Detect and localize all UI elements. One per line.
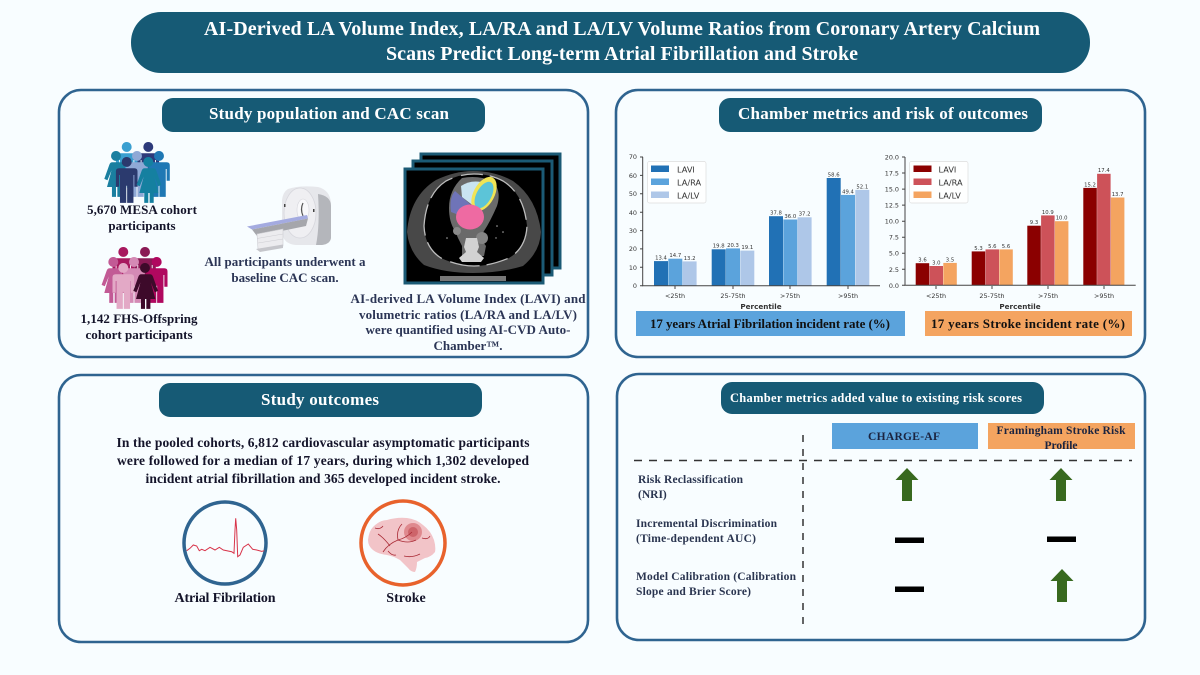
- text: FHS participants: 1,142 FHS-Offspring: [80, 311, 198, 326]
- arrow: NRI Framingham up: [1050, 468, 1072, 501]
- bar chart: atrial fibrillation incident rate: 10: [629, 264, 637, 272]
- bar chart: atrial fibrillation incident rate: 60: [629, 172, 637, 180]
- text: AI-derived metrics: AI-derived LA Volume Index (LAVI) and: [350, 291, 586, 306]
- bar chart: atrial fibrillation incident rate: 37.8: [770, 211, 783, 217]
- bar chart: stroke incident rate: 5.3: [974, 246, 983, 252]
- bar chart: atrial fibrillation incident rate: 49.4: [842, 189, 855, 195]
- text: MESA participants: [87, 202, 198, 233]
- row label: model calibration: Model Calibration (Calibration: [636, 571, 797, 583]
- bar chart: atrial fibrillation incident rate: <25th: [665, 292, 685, 300]
- label: atrial fibrillation: Atrial Fibrilation: [174, 591, 276, 606]
- text: baseline CAC scan: baseline CAC scan.: [231, 270, 339, 285]
- caption: atrial fibrillation rate: [636, 311, 905, 336]
- bar chart: stroke incident rate: [885, 154, 1136, 311]
- bar chart: stroke incident rate: 5.6: [988, 244, 997, 250]
- text: cohort summary: [116, 435, 530, 486]
- column header: Framingham: [988, 423, 1135, 452]
- legend: LAVI: [677, 164, 695, 174]
- bar chart: atrial fibrillation incident rate: 20.3: [727, 243, 739, 249]
- text: cohort summary: incident atrial fibrillation and 365 developed incident stroke.: [146, 471, 500, 486]
- text: AI-derived metrics: Chamber™.: [434, 338, 502, 353]
- panel: chamber metrics and risk of outcomes: [616, 90, 1145, 357]
- icon: FHS-Offspring cohort people: [102, 247, 168, 309]
- row label: risk reclassification: Risk Reclassification: [638, 474, 744, 486]
- bar chart: stroke incident rate: 3.6: [918, 258, 927, 264]
- heading: chamber metrics: [719, 98, 1042, 132]
- row label: risk reclassification: (NRI): [638, 489, 667, 501]
- bar chart: atrial fibrillation incident rate: 30: [629, 227, 637, 235]
- column header: Framingham: Framingham Stroke Risk: [996, 425, 1126, 437]
- heading: study outcomes: [159, 383, 482, 417]
- bar chart: stroke incident rate: 20.0: [885, 154, 899, 162]
- bar chart: stroke incident rate: 9.3: [1030, 220, 1038, 226]
- column header: CHARGE-AF: [832, 423, 978, 449]
- bar chart: atrial fibrillation incident rate: Percentile: [740, 302, 782, 311]
- bar chart: stroke incident rate: 25-75th: [979, 292, 1005, 300]
- caption: stroke rate: 17 years Stroke incident rate (%): [931, 316, 1125, 331]
- icon: MESA cohort people: [104, 142, 170, 203]
- bar chart: stroke incident rate: Percentile: [999, 302, 1041, 311]
- label: stroke: Stroke: [386, 591, 426, 606]
- bar chart: atrial fibrillation incident rate: 13.2: [684, 256, 695, 262]
- bar chart: stroke incident rate: 12.5: [885, 202, 899, 210]
- bar chart: atrial fibrillation incident rate: 20: [629, 245, 637, 253]
- legend: LA/LV: [938, 190, 961, 200]
- text: baseline CAC scan: All participants underwent a: [204, 254, 366, 269]
- row label: incremental discrimination: [636, 518, 778, 545]
- bar chart: atrial fibrillation incident rate: [629, 153, 880, 311]
- title: [131, 12, 1090, 73]
- legend: LA/RA: [677, 178, 701, 188]
- arrow: calibration Framingham up: [1050, 569, 1074, 602]
- bar chart: stroke incident rate: 3.0: [932, 260, 941, 266]
- row label: model calibration: [636, 571, 797, 598]
- bar chart: stroke incident rate: 10.9: [1042, 210, 1054, 216]
- icon: stroke brain: [361, 501, 445, 585]
- heading: study outcomes: Study outcomes: [261, 390, 379, 409]
- legend: LA/LV: [677, 190, 700, 200]
- row label: incremental discrimination: (Time-dependent AUC): [636, 533, 756, 545]
- bar chart: atrial fibrillation incident rate: >95th: [838, 292, 858, 300]
- bar chart: stroke incident rate: 7.5: [889, 234, 899, 242]
- bar chart: stroke incident rate: 15.2: [1084, 182, 1096, 188]
- heading: added value: Chamber metrics added value to existing risk scores: [730, 391, 1022, 405]
- text: MESA participants: 5,670 MESA cohort: [87, 202, 198, 217]
- legend: [648, 162, 706, 203]
- icon: atrial fibrillation ECG: [184, 502, 266, 584]
- text: cohort summary: In the pooled cohorts, 6,812 cardiovascular asymptomatic participants: [116, 435, 530, 450]
- caption: atrial fibrillation rate: 17 years Atrial Fibrilation incident rate (%): [650, 316, 890, 331]
- heading: added value: [721, 382, 1044, 414]
- legend: LAVI: [938, 164, 956, 174]
- bar chart: atrial fibrillation incident rate: 52.1: [856, 184, 868, 190]
- heading: study population: Study population and CAC scan: [209, 104, 450, 123]
- bar chart: stroke incident rate: 17.4: [1098, 168, 1110, 174]
- bar chart: atrial fibrillation incident rate: 50: [629, 190, 637, 198]
- text: baseline CAC scan: [204, 254, 366, 285]
- bar chart: atrial fibrillation incident rate: 19.1: [741, 245, 753, 251]
- text: FHS participants: [80, 311, 198, 342]
- heading: study population: [162, 98, 485, 132]
- bar chart: atrial fibrillation incident rate: 40: [629, 209, 637, 217]
- dash: calibration CHARGE-AF no change: [895, 586, 924, 592]
- dash: AUC CHARGE-AF no change: [895, 538, 924, 543]
- image: CT slices with segmented chambers: [405, 154, 560, 283]
- bar chart: stroke incident rate: 0.0: [889, 282, 899, 290]
- caption: stroke rate: [925, 311, 1132, 336]
- row label: incremental discrimination: Incremental Discrimination: [636, 518, 778, 530]
- text: AI-derived metrics: volumetric ratios (LA/RA and LA/LV): [359, 307, 577, 322]
- arrow: NRI CHARGE-AF up: [896, 468, 918, 501]
- bar chart: stroke incident rate: 10.0: [885, 218, 899, 226]
- bar chart: atrial fibrillation incident rate: 14.7: [669, 253, 681, 259]
- bar chart: stroke incident rate: 3.5: [946, 257, 954, 263]
- bar chart: atrial fibrillation incident rate: 25-75th: [720, 292, 746, 300]
- bar chart: atrial fibrillation incident rate: 13.4: [655, 256, 668, 262]
- column header: CHARGE-AF: CHARGE-AF: [868, 431, 940, 443]
- bar chart: atrial fibrillation incident rate: 19.8: [713, 244, 725, 250]
- bar chart: stroke incident rate: >95th: [1094, 292, 1114, 300]
- bar chart: atrial fibrillation incident rate: 0: [633, 282, 637, 290]
- column header: Framingham: Profile: [1044, 440, 1078, 452]
- bar chart: stroke incident rate: 5.0: [889, 250, 899, 258]
- bar chart: stroke incident rate: 13.7: [1112, 192, 1123, 198]
- bar chart: atrial fibrillation incident rate: 37.2: [799, 212, 810, 218]
- bar chart: atrial fibrillation incident rate: >75th: [780, 292, 800, 300]
- row label: model calibration: Slope and Brier Score): [636, 586, 751, 598]
- legend: LA/RA: [938, 178, 963, 188]
- icon: CT scanner: [247, 186, 331, 252]
- text: FHS participants: cohort participants: [86, 327, 192, 342]
- dash: AUC Framingham no change: [1047, 536, 1076, 542]
- bar chart: stroke incident rate: 10.0: [1056, 216, 1068, 222]
- text: cohort summary: were followed for a median of 17 years, during which 1,302 developed: [117, 453, 529, 468]
- bar chart: atrial fibrillation incident rate: 58.6: [828, 172, 840, 178]
- row label: risk reclassification: [638, 474, 744, 501]
- bar chart: stroke incident rate: 17.5: [885, 170, 899, 178]
- legend: [910, 162, 968, 203]
- bar chart: stroke incident rate: <25th: [926, 292, 946, 300]
- text: AI-derived metrics: were quantified using AI-CVD Auto-: [366, 322, 570, 337]
- bar chart: stroke incident rate: 5.6: [1002, 244, 1011, 250]
- text: AI-derived metrics: [350, 291, 586, 353]
- bar chart: stroke incident rate: 2.5: [889, 266, 899, 274]
- text: MESA participants: participants: [108, 218, 176, 233]
- bar chart: atrial fibrillation incident rate: 70: [629, 153, 637, 161]
- panel: study outcomes: [59, 375, 588, 642]
- title: AI-Derived LA Volume Index, LA/RA and LA/LV Volume Ratios from Coronary Artery Calcium: [204, 18, 1040, 40]
- title: Scans Predict Long-term Atrial Fibrillation and Stroke: [386, 43, 858, 65]
- bar chart: atrial fibrillation incident rate: 36.0: [784, 214, 797, 220]
- panel: study population and CAC scan: [59, 90, 588, 357]
- panel: added value to risk scores: [617, 374, 1145, 640]
- heading: chamber metrics: Chamber metrics and risk of outcomes: [738, 104, 1028, 123]
- bar chart: stroke incident rate: >75th: [1038, 292, 1058, 300]
- bar chart: stroke incident rate: 15.0: [885, 186, 899, 194]
